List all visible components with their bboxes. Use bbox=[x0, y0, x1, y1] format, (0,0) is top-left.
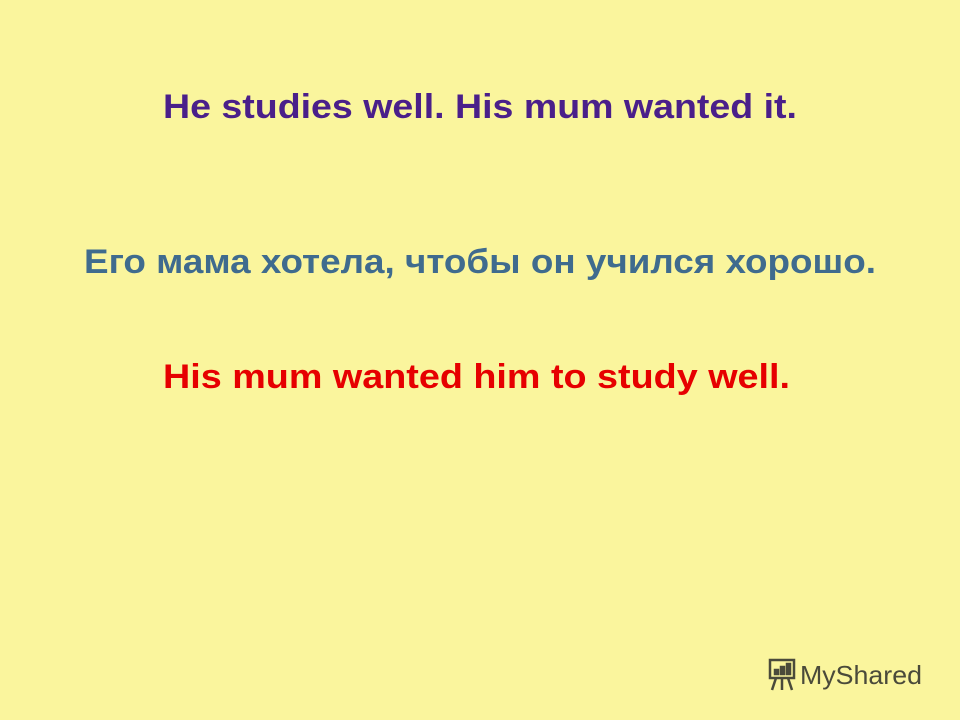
text: english answer: His mum wanted him to study well. bbox=[163, 358, 790, 396]
heading: english sentence: He studies well. His mum wanted it. bbox=[163, 88, 797, 126]
logo: MyShared watermark bbox=[770, 660, 922, 690]
text: MyShared: MyShared bbox=[800, 660, 922, 690]
icon: presentation board bbox=[770, 660, 794, 690]
text: russian translation: Его мама хотела, чтобы он учился хорошо. bbox=[84, 243, 876, 281]
